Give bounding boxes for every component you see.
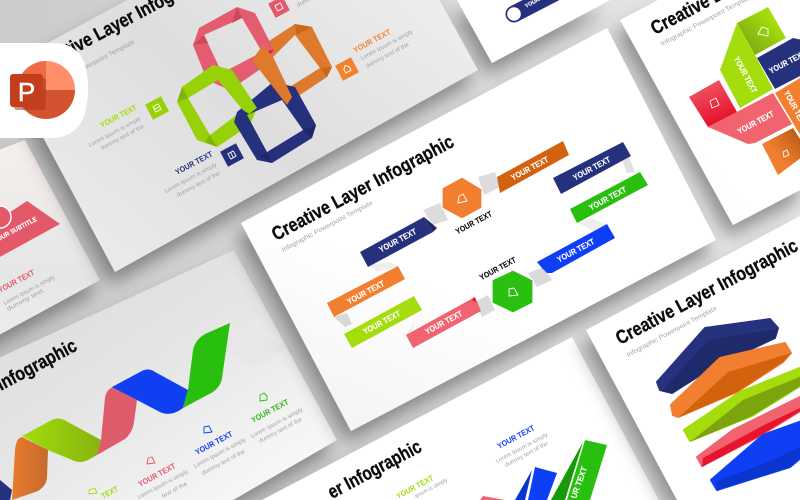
label: hex orange: YOUR TEXT <box>454 209 494 236</box>
text block: navy label <box>164 150 221 199</box>
ribbon: navy left: YOUR TEXT <box>377 226 419 254</box>
text block: orange label: dummy text of the <box>365 42 410 70</box>
text block: lime label: YOUR TEXT <box>395 474 435 500</box>
block: orange <box>775 77 800 138</box>
subtitle: Infographic Powerpoint Template <box>626 305 718 359</box>
text block: pink label <box>0 268 56 313</box>
bar: blue <box>515 467 557 500</box>
ribbon: dark orange <box>497 141 569 193</box>
panel: rings slide <box>5 0 478 272</box>
icon tile: orange <box>335 57 359 81</box>
text block: orange label: Lorem Ipsum is simply <box>360 29 414 62</box>
text block: navy label: Lorem Ipsum is simply <box>164 162 218 195</box>
layer: orange <box>671 343 791 418</box>
panel: center ribbons slide <box>241 28 716 431</box>
ribbon: green <box>570 172 648 223</box>
text block: pink label: dummy text. <box>6 288 46 313</box>
text block: blue step: YOUR TEXT <box>194 430 234 457</box>
panel: bars slide bottom <box>262 337 659 500</box>
block: pink <box>689 80 792 144</box>
text block: navy label: YOUR TEXT <box>174 150 214 177</box>
panel: pill slide top <box>457 0 610 63</box>
subtitle: Infographic Powerpoint Template <box>43 39 136 93</box>
ribbon: pink <box>406 297 481 348</box>
text block: pink step: YOUR TEXT <box>137 462 177 489</box>
text block: blue label: dummy text of the <box>504 441 549 469</box>
text block: orange label: YOUR TEXT <box>352 28 392 55</box>
ribbon: green: YOUR TEXT <box>587 184 629 212</box>
block: lime: YOUR TEXT <box>732 55 760 95</box>
text block: blue step: Lorem Ipsum is simply <box>193 437 247 470</box>
text block: green step <box>250 393 304 445</box>
text block: lime label: YOUR TEXT <box>99 103 138 130</box>
icon tile: pink <box>268 0 290 18</box>
ribbon: navy right: YOUR TEXT <box>571 154 613 182</box>
ribbon: blue <box>537 224 615 273</box>
ribbon: lime <box>344 296 422 348</box>
ribbon: navy right <box>553 142 631 194</box>
block: orange lower <box>762 128 800 175</box>
panel: blocks slide right <box>620 0 800 225</box>
ribbon: navy left <box>360 217 437 267</box>
text block: orange label <box>352 28 414 70</box>
bar: green: UR TEXT <box>568 464 589 500</box>
icon tile: lime <box>145 96 169 120</box>
block: pink: YOUR TEXT <box>736 108 776 136</box>
layer: pink <box>697 396 800 467</box>
text block: blue step: dummy text of the <box>201 449 246 477</box>
layer: blue <box>711 421 800 490</box>
text block: lime label <box>88 103 145 152</box>
ribbon: orange <box>327 266 405 317</box>
panel: stacked layers slide <box>586 215 800 500</box>
chart: interlocked rings <box>177 7 332 163</box>
ribbon: blue: YOUR TEXT <box>555 236 597 264</box>
ribbon: dark orange: YOUR TEXT <box>509 154 551 182</box>
text block: lime label: Lorem Ipsum is simply <box>88 116 142 149</box>
text block: pink step: text of the <box>161 481 189 500</box>
text block: lime label: ipsum is simply <box>414 478 449 500</box>
icon: PowerPoint disc: P <box>18 77 35 107</box>
bar: pink <box>480 496 505 500</box>
text block: green step: YOUR TEXT <box>250 398 290 425</box>
text block: navy label: dummy text of the <box>176 171 221 199</box>
hexagon: green <box>492 270 533 313</box>
panel: wave slide <box>0 250 337 500</box>
label: hex green: YOUR TEXT <box>478 255 518 282</box>
block: navy <box>757 38 800 89</box>
text block: lime label: dummy text of the <box>100 124 145 152</box>
text block: pink label: Lorem Ipsum is simply <box>3 275 56 307</box>
pill control <box>507 0 570 21</box>
text block: blue label: YOUR TEXT <box>496 424 536 451</box>
ribbon: orange: YOUR TEXT <box>345 278 387 306</box>
connector folds <box>334 157 635 335</box>
ribbon: pink: YOUR TEXT <box>423 308 465 336</box>
text block: lime step <box>89 484 120 500</box>
text block: blue label: Lorem Ipsum is simply <box>495 432 549 465</box>
subtitle: Infographic Powerpoint Template <box>281 200 374 254</box>
panel: subtitle slide left <box>0 140 100 367</box>
layer: navy <box>657 319 778 393</box>
text block: green step: Lorem Ipsum is simply <box>250 407 304 440</box>
ribbon: lime: YOUR TEXT <box>361 308 403 336</box>
block: lime <box>720 7 786 108</box>
text block: blue step <box>193 426 247 477</box>
subtitle ribbon <box>0 201 60 258</box>
icon: PowerPoint logo badge <box>0 43 88 138</box>
title: Creative Layer Infographic <box>268 131 458 245</box>
text block: green step: dummy text of the <box>258 417 303 445</box>
text block: pink step: Lorem Ipsum is simply <box>137 469 189 500</box>
icon tile: navy <box>220 143 244 167</box>
layer: lime <box>684 367 800 442</box>
bar: green <box>551 440 607 500</box>
hexagon: orange <box>442 177 482 219</box>
chart: ribbon wave <box>0 322 287 500</box>
